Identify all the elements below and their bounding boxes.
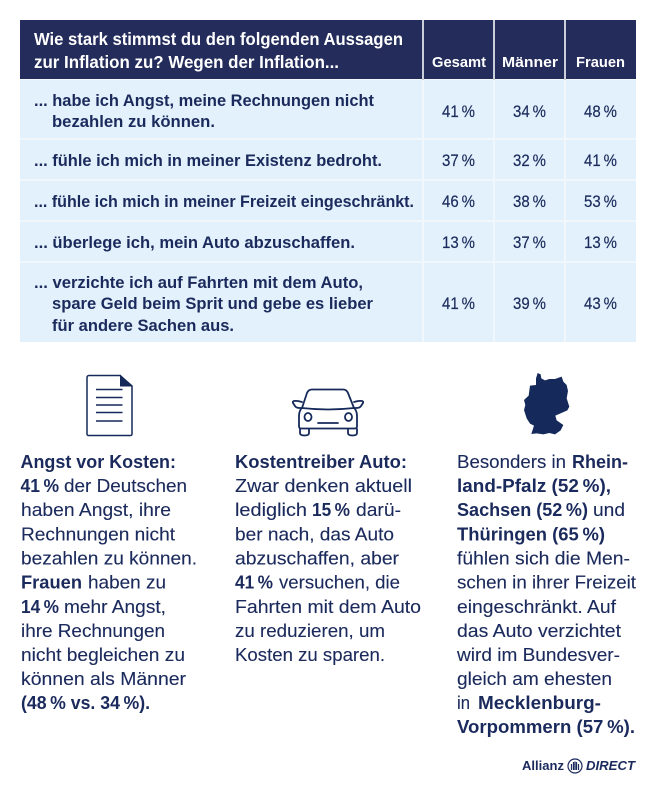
panel: Bundesländer <box>456 373 636 737</box>
text: Angst vor Kosten: mehr Angst, <box>64 596 166 617</box>
text: Angst vor Kosten: haben Angst, ihre <box>21 499 171 520</box>
table row 2: 32 % <box>513 152 546 170</box>
icon: document <box>87 376 132 436</box>
table row 5: ... verzichte ich auf Fahrten mit dem Auto, <box>34 273 363 292</box>
text: Bundesländer: Rhein- <box>572 451 628 472</box>
text: Kostentreiber Auto: lediglich <box>235 499 307 520</box>
text: Angst vor Kosten: können als Männer <box>21 668 186 689</box>
text: Angst vor Kosten: Frauen <box>21 572 82 592</box>
table row 5: spare Geld beim Sprit und gebe es lieber <box>52 294 373 313</box>
text: Kostentreiber Auto: darü- <box>356 499 401 520</box>
text: Kostentreiber Auto: Zwar denken aktuell <box>235 475 412 496</box>
text: Bundesländer: das Auto verzichtet <box>457 620 621 641</box>
logo: Allianz Direct: Allianz <box>522 758 564 773</box>
text: Angst vor Kosten: 41 % <box>20 475 59 496</box>
panel: Kostentreiber Auto <box>235 390 421 665</box>
table row 1: 41 % <box>442 103 475 121</box>
text: Kostentreiber Auto: versuchen, die <box>279 572 400 592</box>
table row 4 <box>20 222 636 261</box>
table header <box>20 20 636 80</box>
text: Angst vor Kosten: (48 % vs. 34 %). <box>21 692 150 713</box>
text: Angst vor Kosten: haben zu <box>88 572 166 592</box>
table row 2: ... fühle ich mich in meiner Existenz bedroht. <box>34 151 382 170</box>
text: Kostentreiber Auto: Kosten zu sparen. <box>235 644 385 665</box>
text: Angst vor Kosten: ihre Rechnungen <box>21 620 165 641</box>
text: Bundesländer: fühlen sich die Men- <box>457 548 630 568</box>
table row 1: ... habe ich Angst, meine Rechnungen nicht <box>34 91 374 110</box>
text: Bundesländer: und <box>593 499 625 520</box>
text: Bundesländer <box>456 451 636 737</box>
logo: Allianz Direct: DIRECT <box>586 758 636 773</box>
text: Bundesländer: Besonders in <box>457 451 566 472</box>
icon: map of Germany <box>524 373 569 434</box>
text: Bundesländer: in <box>457 692 470 713</box>
table row 2: 41 % <box>584 152 617 170</box>
table header: Frauen <box>576 54 625 71</box>
text: Bundesländer: Thüringen (65 %) <box>457 524 605 544</box>
text: Bundesländer: Vorpommern (57 %). <box>457 716 635 737</box>
table row 4: 13 % <box>584 234 617 252</box>
table header: Gesamt <box>432 54 486 71</box>
text: Bundesländer: eingeschränkt. Auf <box>457 596 617 617</box>
text: Angst vor Kosten: 14 % <box>21 596 59 617</box>
text: Kostentreiber Auto: abzuschaffen, aber <box>235 548 399 568</box>
logo: Allianz Direct <box>522 758 636 773</box>
text: Kostentreiber Auto: ber nach, das Auto <box>235 524 394 544</box>
text: Bundesländer: Mecklenburg- <box>478 692 601 713</box>
table header: zur Inflation zu? Wegen der Inflation... <box>34 52 339 72</box>
table row 5: 39 % <box>513 295 546 313</box>
table row 1: 48 % <box>584 103 617 121</box>
table row 3: 38 % <box>513 193 546 211</box>
table row 2: 37 % <box>442 152 475 170</box>
text: Bundesländer: gleich am ehesten <box>457 668 612 689</box>
text: Angst vor Kosten <box>20 451 197 713</box>
table row 2 <box>20 140 636 179</box>
icon: car <box>293 390 363 436</box>
text: Kostentreiber Auto: 41 % <box>235 572 273 592</box>
text: Angst vor Kosten: Rechnungen nicht <box>21 524 175 544</box>
text: Kostentreiber Auto: zu reduzieren, um <box>235 620 385 641</box>
table row 3: 46 % <box>442 193 475 211</box>
text: Angst vor Kosten: der Deutschen <box>64 475 187 496</box>
table row 4: 13 % <box>442 234 475 252</box>
text: Bundesländer: wird im Bundesver- <box>456 644 620 665</box>
text: Angst vor Kosten: Angst vor Kosten: <box>20 451 176 472</box>
table header: Wie stark stimmst du den folgenden Aussagen <box>34 29 403 49</box>
table row 3: ... fühle ich mich in meiner Freizeit eingeschränkt. <box>34 192 414 211</box>
table row 4: ... überlege ich, mein Auto abzuschaffen. <box>34 233 355 252</box>
text: Bundesländer: schen in ihrer Freizeit <box>457 572 636 592</box>
text: Bundesländer: land-Pfalz (52 %), <box>457 475 611 496</box>
text: Kostentreiber Auto <box>235 451 421 665</box>
table header: Männer <box>502 54 558 71</box>
table row 1: 34 % <box>513 103 546 121</box>
text: Bundesländer: Sachsen (52 %) <box>457 499 588 520</box>
table row 1: bezahlen zu können. <box>52 112 215 131</box>
text: Angst vor Kosten: bezahlen zu können. <box>21 548 197 568</box>
table row 5: für andere Sachen aus. <box>52 316 234 335</box>
survey table <box>20 20 636 342</box>
panel: Angst vor Kosten <box>20 376 197 713</box>
text: Kostentreiber Auto: Fahrten mit dem Auto <box>235 596 421 617</box>
table row 3: 53 % <box>584 193 617 211</box>
table row 1 <box>20 80 636 138</box>
text: Kostentreiber Auto: 15 % <box>312 499 350 520</box>
table row 5: 41 % <box>442 295 475 313</box>
table row 5: 43 % <box>584 295 617 313</box>
text: Kostentreiber Auto: Kostentreiber Auto: <box>235 451 407 472</box>
table row 4: 37 % <box>513 234 546 252</box>
table row 5 <box>20 263 636 342</box>
table row 3 <box>20 181 636 220</box>
text: Angst vor Kosten: nicht begleichen zu <box>21 644 185 665</box>
